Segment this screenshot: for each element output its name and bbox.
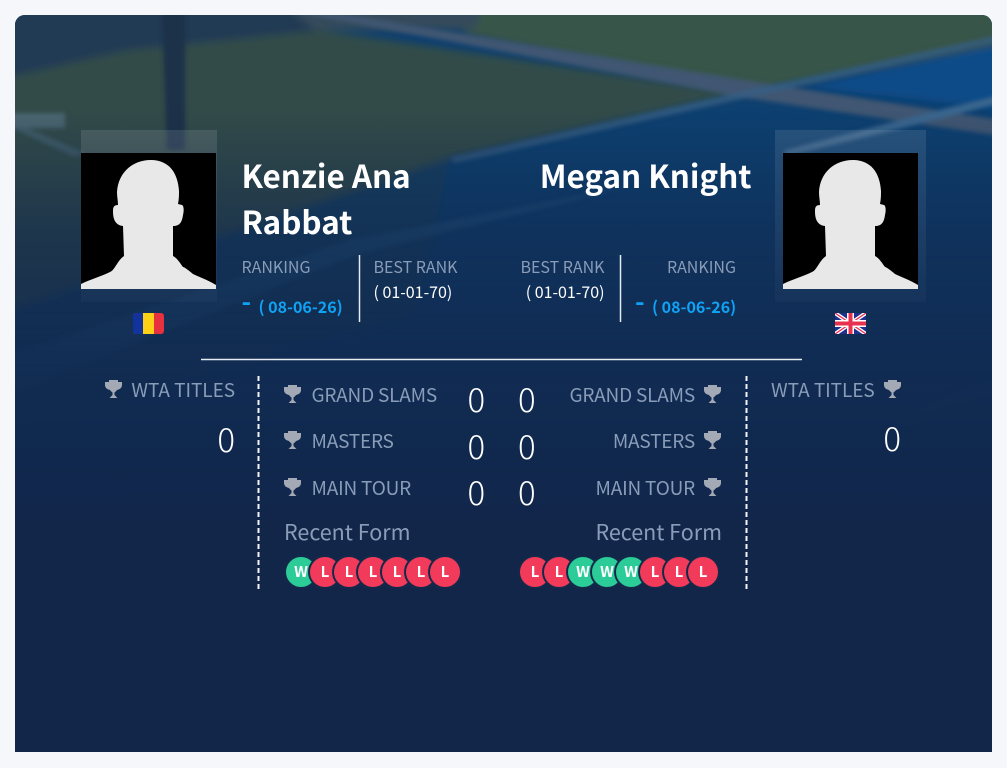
text: player one ranking: - xyxy=(242,282,251,319)
text: player two best rank: BEST RANK xyxy=(520,254,604,278)
text: player two tournament labels: MAIN TOUR xyxy=(596,474,695,501)
text: player two ranking: ( 08-06-26) xyxy=(652,294,736,318)
icon: trophies xyxy=(105,380,901,496)
panel: player two photo xyxy=(775,130,926,302)
text: player one tournament counts: 0 xyxy=(468,421,485,469)
text: player one tournament labels: MASTERS xyxy=(312,427,394,454)
text: player one tournament labels: MAIN TOUR xyxy=(312,474,411,501)
text: player one ranking xyxy=(242,254,343,319)
text: WTA titles left: 0 xyxy=(217,414,235,462)
text: player two tournament counts: 0 xyxy=(518,421,536,469)
text: player one best rank: ( 01-01-70) xyxy=(374,279,452,303)
text: player two tournament labels: GRAND SLAMS xyxy=(570,381,695,408)
chart: recent form badges right: L xyxy=(651,561,659,582)
chart: recent form badges left: L xyxy=(345,561,353,582)
heading: player one name: Kenzie Ana xyxy=(242,153,411,198)
chart: recent form badges left: L xyxy=(417,561,425,582)
text: player one ranking: ( 08-06-26) xyxy=(258,294,343,318)
text: player two ranking xyxy=(635,254,736,319)
chart: recent form badges right xyxy=(520,557,718,587)
text: player one best rank xyxy=(374,254,458,303)
text: player two tournament counts: 0 xyxy=(518,374,536,422)
chart: recent form badges left: L xyxy=(441,561,449,582)
text: WTA titles left xyxy=(131,376,235,462)
chart: recent form badges left: L xyxy=(321,561,329,582)
text: WTA titles left: WTA TITLES xyxy=(131,376,235,403)
text: player two tournament counts xyxy=(518,374,536,515)
text: player two best rank: ( 01-01-70) xyxy=(526,279,604,303)
text: player two ranking: RANKING xyxy=(667,254,736,278)
text: player one tournament labels xyxy=(312,381,437,501)
heading: player one name xyxy=(242,153,411,244)
text: player two ranking: - xyxy=(635,282,645,319)
chart: recent form badges right: L xyxy=(675,561,683,582)
text: player one tournament counts: 0 xyxy=(468,467,485,515)
text: WTA titles right xyxy=(771,376,901,461)
text: player one tournament labels: GRAND SLAMS xyxy=(312,381,437,408)
text: player one best rank: BEST RANK xyxy=(374,254,458,278)
icon: Romania flag xyxy=(133,313,164,334)
chart: recent form badges right: W xyxy=(576,561,590,582)
text: player one ranking: RANKING xyxy=(242,254,311,278)
icon: UK flag xyxy=(835,313,866,334)
chart: recent form badges left: L xyxy=(369,561,377,582)
heading: player two name: Megan Knight xyxy=(540,153,752,198)
text: player two tournament labels: MASTERS xyxy=(613,427,695,454)
heading: recent form left: Recent Form xyxy=(284,516,411,546)
chart: recent form badges left: L xyxy=(393,561,401,582)
chart: recent form badges left xyxy=(286,557,460,587)
panel: player one photo xyxy=(81,130,217,302)
text: player one tournament counts: 0 xyxy=(468,374,485,422)
text: player one tournament counts xyxy=(468,374,485,515)
chart: recent form badges left: W xyxy=(294,561,308,582)
text: player two tournament labels xyxy=(570,381,695,501)
text: player two best rank xyxy=(520,254,604,303)
chart: recent form badges right: W xyxy=(600,561,614,582)
chart: recent form badges right: W xyxy=(624,561,638,582)
text: WTA titles right: 0 xyxy=(883,413,901,461)
heading: recent form right: Recent Form xyxy=(595,516,722,546)
heading: player one name: Rabbat xyxy=(242,199,352,244)
text: player two tournament counts: 0 xyxy=(518,467,536,515)
chart: recent form badges right: L xyxy=(699,561,707,582)
chart: recent form badges right: L xyxy=(531,561,539,582)
chart: recent form badges right: L xyxy=(555,561,563,582)
text: WTA titles right: WTA TITLES xyxy=(771,376,875,403)
